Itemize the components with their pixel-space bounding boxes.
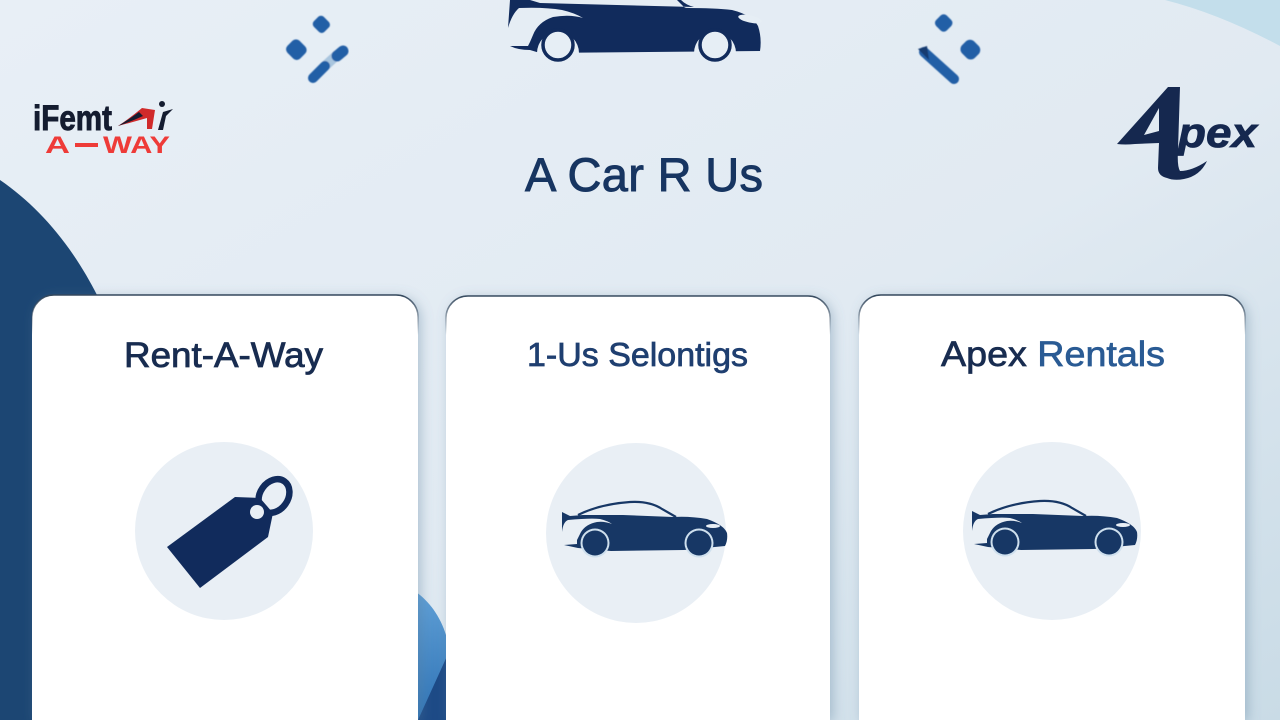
panel: Rent-A-Way [32, 295, 418, 720]
logo: Rent-A-Way: iFemt [33, 99, 112, 138]
panel: Apex Rentals [859, 295, 1245, 720]
decorative corner: top right [1165, 0, 1280, 46]
logo: Rent-A-Way [33, 99, 173, 159]
logo: Rent-A-Way: WAY [103, 132, 170, 159]
icon: car [972, 501, 1137, 556]
card background [859, 295, 1245, 720]
icon: sparkle marks left of car [284, 14, 343, 78]
icon: car at top [508, 0, 762, 60]
decorative shape: dark blue left curve [0, 180, 100, 720]
logo: Apex: pex [1177, 109, 1259, 156]
panel: 1-Us Selontigs [446, 296, 830, 720]
card background [32, 295, 418, 720]
heading: Rent-A-Way: Rent-A-Way [124, 336, 324, 375]
card top edge [446, 296, 830, 340]
logo: Apex [1117, 87, 1259, 180]
card top edge [859, 295, 1245, 340]
icon circle [546, 443, 726, 623]
title: A Car R Us [525, 148, 763, 201]
icon circle [135, 442, 313, 620]
logo: Rent-A-Way: A [45, 132, 70, 159]
icon circle [963, 442, 1141, 620]
heading: 1-Us Selontigs: 1-Us Selontigs [527, 336, 748, 373]
icon: price tag [167, 473, 296, 588]
decorative shape: blue wedge between cards [416, 592, 448, 720]
icon: car [562, 502, 727, 558]
icon: sparkle marks right of car [918, 12, 983, 79]
heading: Apex Rentals: Apex Rentals [941, 335, 1165, 374]
card background [446, 296, 830, 720]
card top edge [32, 295, 418, 340]
